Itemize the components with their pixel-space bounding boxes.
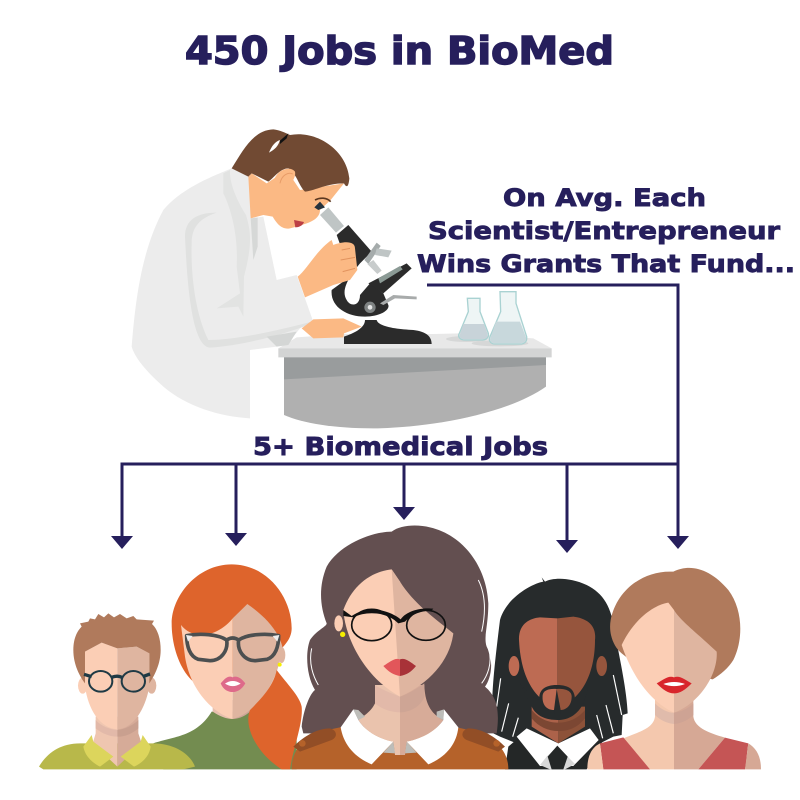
head and hair — [232, 129, 349, 229]
person: man with glasses — [39, 613, 195, 769]
table — [278, 333, 552, 428]
subheading: jobs funded: 5+ Biomedical Jobs — [253, 432, 548, 461]
callout text: grant funding — [417, 184, 795, 278]
illustration: scientist at microscope — [132, 129, 552, 428]
person: woman with red hair — [153, 564, 302, 769]
lab coat — [132, 166, 313, 418]
microscope — [320, 207, 432, 344]
person: woman with short brown hair — [587, 568, 761, 769]
callout text: grant funding: On Avg. Each — [503, 184, 706, 212]
hands — [298, 240, 362, 338]
callout text: grant funding: Wins Grants That Fund... — [417, 250, 795, 278]
callout text: grant funding: Scientist/Entrepreneur — [428, 217, 780, 245]
person: man with dreadlocks — [492, 577, 628, 769]
lab flasks — [446, 292, 528, 346]
person: woman with wavy hair — [292, 525, 508, 769]
connector arrows — [111, 285, 689, 553]
title: 450 Jobs in BioMed — [185, 29, 614, 73]
